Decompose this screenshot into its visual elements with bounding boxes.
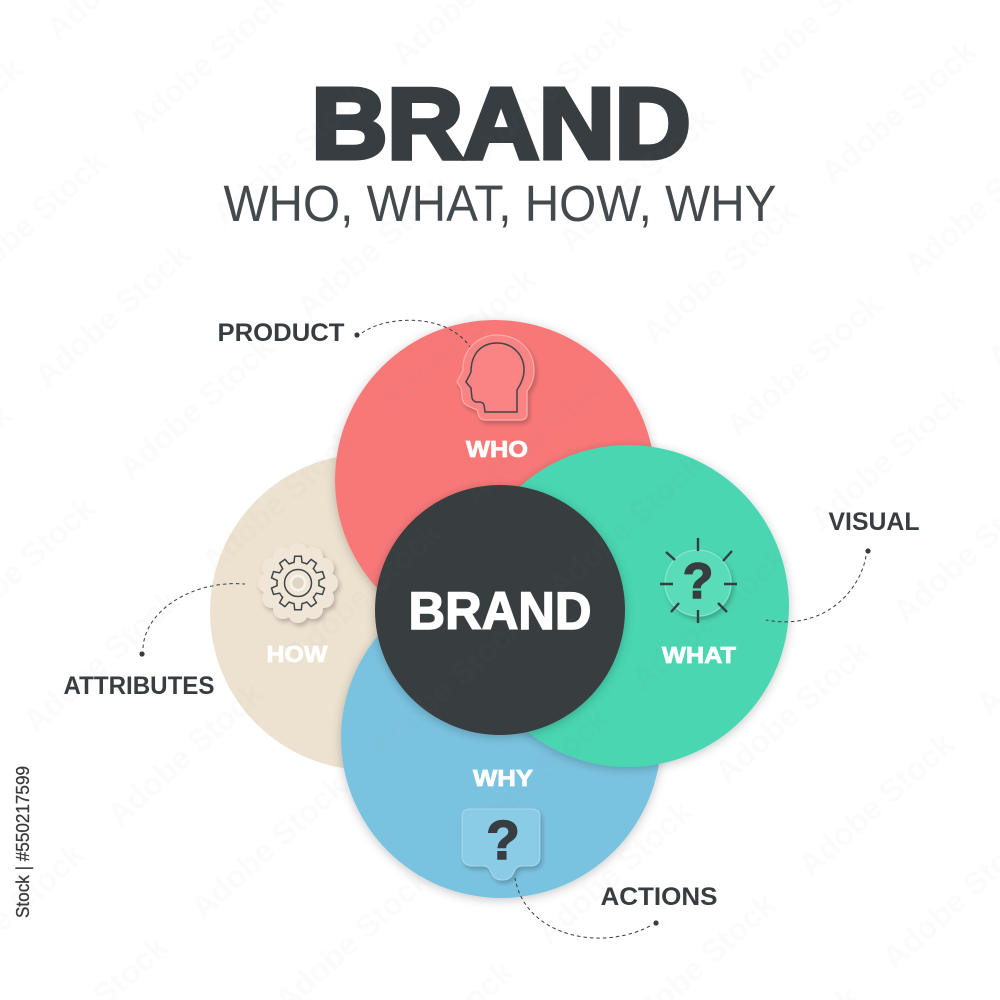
circle: who (335, 320, 655, 640)
callout: product: PRODUCT (218, 319, 344, 347)
section: who (457, 335, 534, 462)
section: how (258, 543, 338, 667)
label: how: HOW (266, 641, 328, 667)
title (224, 68, 776, 232)
callout: visual (766, 508, 920, 622)
label: what: WHAT (662, 642, 736, 668)
label: who: WHO (466, 436, 528, 462)
icon: head (457, 335, 534, 420)
callout: visual: VISUAL (828, 508, 920, 536)
center label: BRAND (408, 582, 592, 641)
callout: actions: ACTIONS (600, 883, 718, 911)
callout: attributes (64, 584, 245, 700)
section: what (660, 538, 737, 668)
circle: how (210, 454, 526, 770)
circle: why (341, 578, 661, 898)
icon: question burst: ? (683, 553, 713, 609)
icon: gear (258, 543, 338, 623)
icon: question bubble: ? (486, 809, 520, 871)
callout: actions (515, 878, 718, 938)
subtitle: WHO, WHAT, HOW, WHY (224, 175, 776, 232)
callout: product (218, 319, 470, 347)
stock id: Stock | #550217599 (12, 766, 33, 918)
callout: attributes: ATTRIBUTES (64, 672, 214, 700)
title: BRAND (312, 68, 690, 180)
label: why: WHY (473, 765, 533, 791)
circle: what (467, 445, 789, 767)
section: why (462, 765, 540, 880)
circle: brand center (375, 485, 625, 735)
